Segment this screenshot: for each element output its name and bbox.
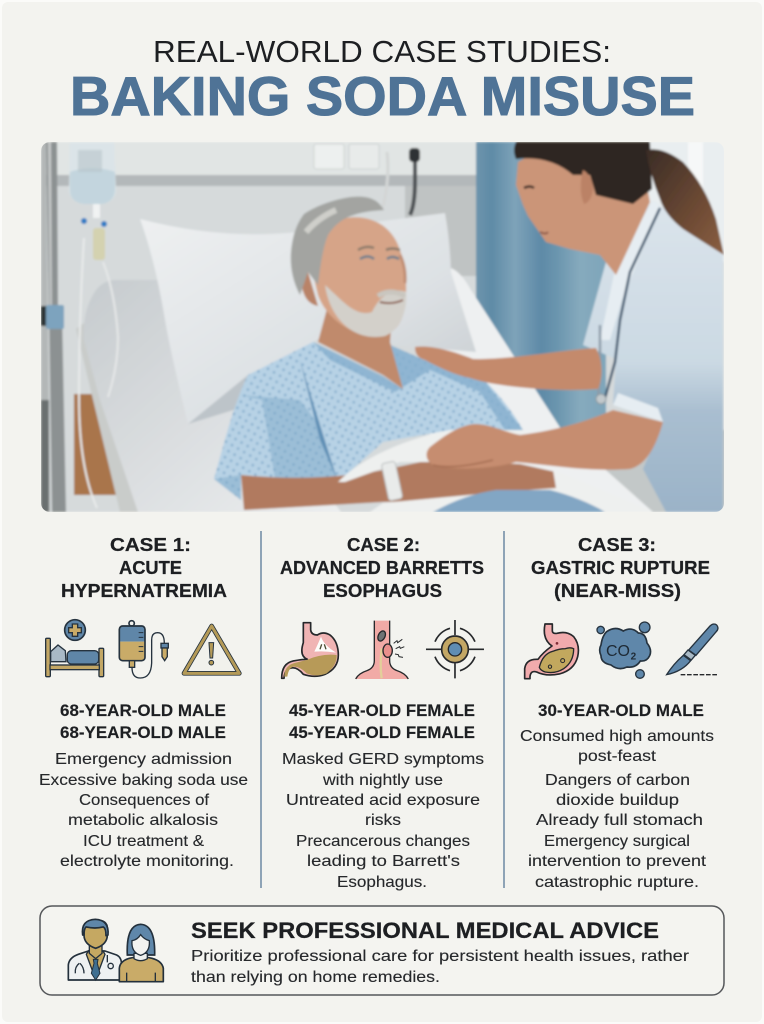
case 3 patient label: 30-YEAR-OLD MALE [538,701,704,720]
case 2 heading [280,535,484,601]
icon: scalpel [667,624,718,675]
title [70,34,695,127]
case 2 details: Precancerous changes [296,833,470,850]
case 3 details: Emergency surgical [544,833,690,850]
case 2 patient label: 45-YEAR-OLD FEMALE [289,723,475,742]
icon: warning triangle [184,626,239,673]
case 2 patient label [289,701,475,742]
icon: CO2 cloud: 2 [631,651,637,662]
icon: IV bag [119,621,168,678]
title: REAL-WORLD CASE STUDIES: [153,34,611,69]
photo: nurse comforting patient in hospital bed [41,142,730,512]
case 2 details [282,751,484,891]
divider [260,531,262,888]
callout text: than relying on home remedies. [191,969,440,986]
case 2 details: with nightly use [322,772,443,789]
case 1 patient label: 68-YEAR-OLD MALE [60,701,226,720]
case 1 heading: HYPERNATREMIA [61,581,227,601]
case 1 details: metabolic alkalosis [68,812,218,829]
case 1 details: Excessive baking soda use [39,772,248,789]
icon: cell target [426,620,484,678]
case 1 details: electrolyte monitoring. [60,853,234,870]
callout: seek professional medical advice [40,906,724,995]
callout text: Prioritize professional care for persistent health issues, rather [191,948,690,965]
callout heading: SEEK PROFESSIONAL MEDICAL ADVICE [191,918,659,943]
case 2 details: risks [365,812,401,829]
case 3 details: Already full stomach [536,812,703,829]
case 1 heading [61,535,227,601]
case 1 heading: ACUTE [119,558,182,578]
case 3 heading: CASE 3: [578,535,656,555]
case 1 patient label [60,701,226,742]
case 3 details: dioxide buildup [556,792,679,809]
case 1 details [39,751,248,870]
case 1 details: Consequences of [79,792,210,809]
case 2 details: Masked GERD symptoms [282,751,484,768]
panel: case 1 [39,535,248,870]
icon: CO2 cloud [597,622,651,678]
case 3 heading: (NEAR-MISS) [554,581,681,601]
case 3 details: post-feast [578,748,657,765]
case 3 details: Dangers of carbon [545,772,690,789]
case 2 details: leading to Barrett's [307,853,460,870]
icon: full stomach [525,624,578,679]
case 3 details [520,728,714,891]
icon: esophagus lesion [356,621,408,679]
case 1 patient label: 68-YEAR-OLD MALE [60,723,226,742]
case 1 heading: CASE 1: [110,535,191,555]
icon: hospital bed [46,620,104,677]
case 2 heading: ESOPHAGUS [323,581,442,601]
case 3 heading: GASTRIC RUPTURE [531,558,710,578]
case 3 heading [531,535,710,601]
case 1 details: Emergency admission [55,751,232,768]
case 2 details: Esophagus. [337,874,427,891]
case 2 heading: CASE 2: [347,535,420,555]
icon: doctor and patient [68,919,163,982]
case 3 details: catastrophic rupture. [535,874,699,891]
case 3 details: intervention to prevent [528,853,707,870]
icon: stomach with reflux [282,623,338,678]
panel: case 3 [520,535,718,891]
case 2 heading: ADVANCED BARRETTS [280,558,484,578]
case 2 details: Untreated acid exposure [286,792,480,809]
case 2 patient label: 45-YEAR-OLD FEMALE [289,701,475,720]
panel: case 2 [280,535,484,891]
case 3 details: Consumed high amounts [520,728,714,745]
case 1 details: ICU treatment & [83,833,204,850]
callout text [191,948,690,986]
divider [503,531,505,888]
icon: CO2 cloud: CO [606,643,630,660]
title: BAKING SODA MISUSE [70,65,695,127]
